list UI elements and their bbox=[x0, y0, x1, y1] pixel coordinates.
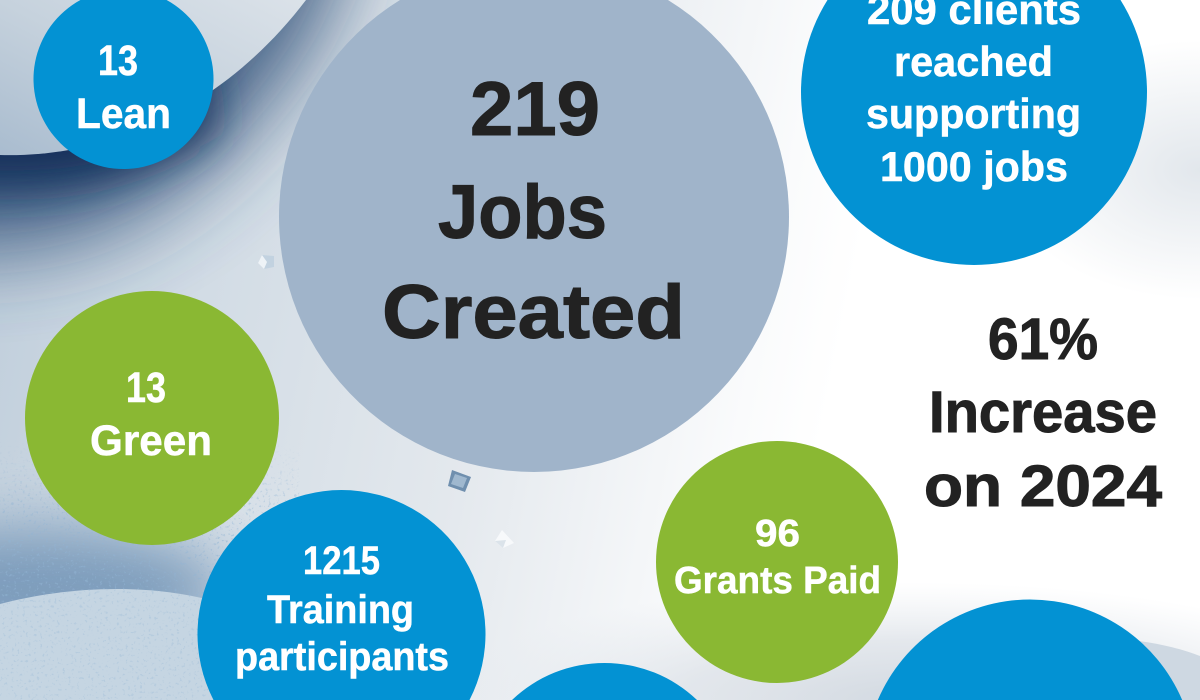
speckle texture bbox=[0, 458, 300, 602]
circle: 219 Jobs Created: 219 bbox=[470, 67, 600, 152]
bottom-right shape bbox=[1100, 640, 1200, 700]
circle: bottom centre bbox=[512, 663, 697, 700]
circle: 1215 Training participants bbox=[198, 490, 486, 700]
circle: 1215 Training participants: participants bbox=[235, 635, 449, 679]
top-left shape bbox=[0, 0, 306, 155]
shadow above bottom-left shape bbox=[0, 528, 230, 652]
circle: 96 Grants Paid bbox=[656, 441, 898, 683]
circle: 96 Grants Paid: 96 bbox=[755, 513, 800, 555]
circle: 209 clients: reached bbox=[894, 38, 1053, 85]
fragment: small crystal bbox=[258, 255, 274, 269]
circle: 13 Green bbox=[25, 291, 279, 545]
circle: bottom right bbox=[878, 600, 1182, 700]
circle: 96 Grants Paid: Grants Paid bbox=[674, 560, 881, 602]
circle: 219 Jobs Created: Jobs bbox=[438, 170, 607, 255]
callout: 61% Increase on 2024: on 2024 bbox=[924, 454, 1162, 519]
circle: 13 Lean bbox=[34, 0, 214, 169]
callout: 61% Increase on 2024: 61% bbox=[988, 307, 1098, 372]
callout: 61% Increase on 2024: Increase bbox=[929, 380, 1157, 445]
callout: 61% Increase on 2024 bbox=[924, 307, 1162, 519]
fragment: blue crystal bbox=[448, 470, 471, 492]
circle: 209 clients bbox=[801, 0, 1147, 265]
circle: 219 Jobs Created bbox=[279, 0, 789, 472]
circle: 209 clients: 1000 jobs bbox=[880, 143, 1068, 190]
circle: 1215 Training participants: Training bbox=[267, 588, 414, 632]
fragment: white crystal bbox=[495, 530, 514, 548]
circle: 1215 Training participants: 1215 bbox=[303, 539, 380, 583]
circle: 13 Green: Green bbox=[90, 417, 212, 465]
circle: 209 clients: supporting bbox=[866, 90, 1081, 137]
bottom-left shape bbox=[0, 589, 214, 700]
circle: 13 Lean: 13 bbox=[98, 37, 138, 85]
circle: 13 Lean: Lean bbox=[76, 90, 171, 138]
shadow under top-left shape bbox=[0, 0, 380, 245]
circle: 219 Jobs Created: Created bbox=[382, 270, 685, 355]
circle: 13 Green: 13 bbox=[126, 364, 166, 412]
